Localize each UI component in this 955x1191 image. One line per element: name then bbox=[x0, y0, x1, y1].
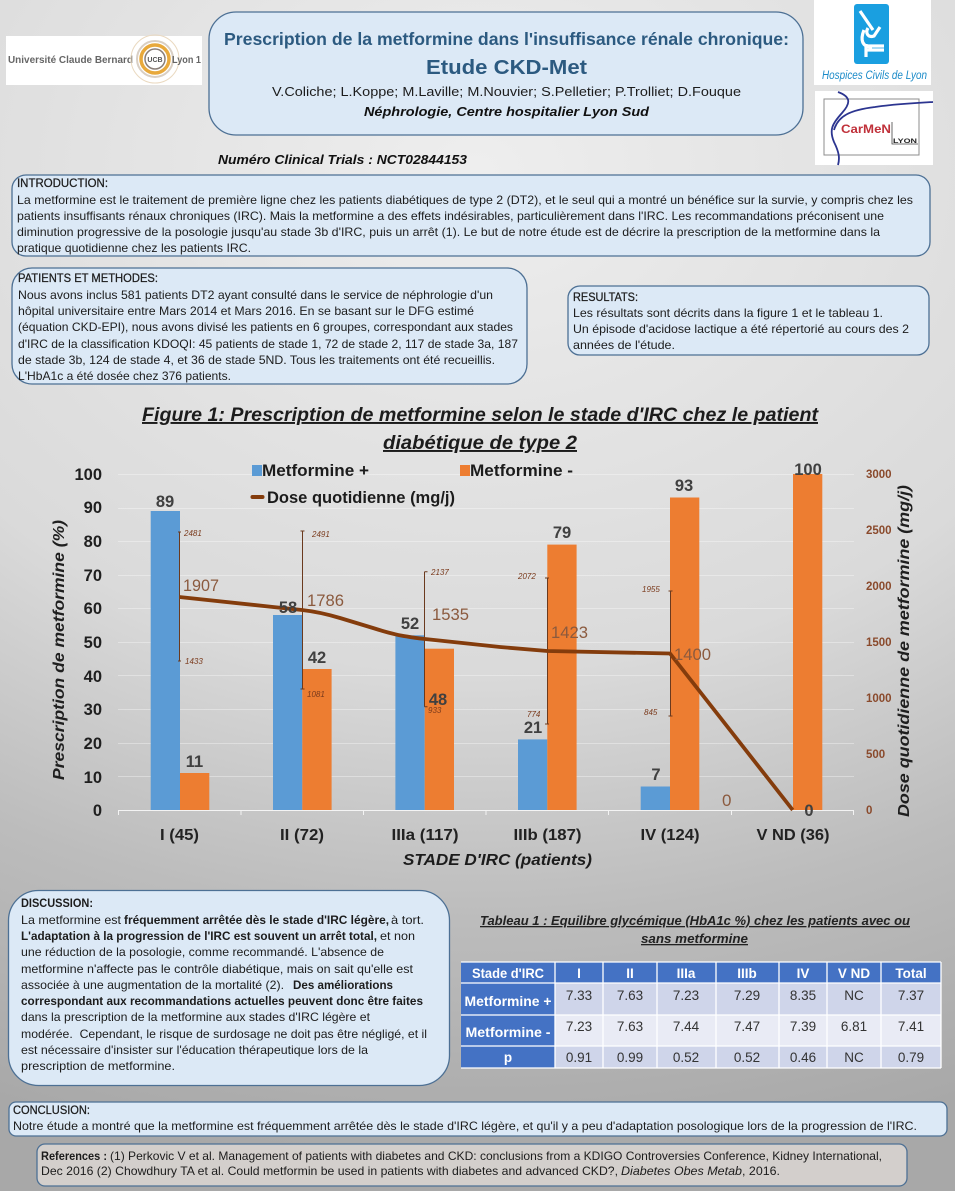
table row: p: 0.52 bbox=[734, 1050, 760, 1065]
right axis values bbox=[866, 469, 892, 817]
table row: p: 0.79 bbox=[898, 1050, 924, 1065]
error bar bounds: 774 bbox=[527, 710, 541, 719]
text: references bbox=[41, 1149, 882, 1178]
text: resultats: Un épisode d'acidose lactique a été répertorié au cours des 2 bbox=[573, 322, 909, 336]
logo: Hospices Civils de Lyon: Hospices Civils de Lyon bbox=[822, 70, 927, 82]
logo: Université Claude Bernard Lyon 1 bbox=[6, 35, 202, 85]
table header row: IIIb bbox=[737, 966, 757, 981]
right axis values: 3000 bbox=[866, 469, 892, 481]
table row: Metformine + bbox=[464, 988, 924, 1009]
left axis values: 100 bbox=[74, 466, 102, 484]
text: discussion: L'adaptation à la progression de l'IRC est souvent un arrêt total, bbox=[21, 929, 377, 943]
table row: Metformine -: 7.39 bbox=[790, 1019, 816, 1034]
text: discussion: est nécessaire d'insister sur l'éducation thérapeutique lors de la bbox=[21, 1043, 368, 1057]
text: patients et methodes: d'IRC de la classification KDOQI: 45 patients de stade 1, 72 de stade 2, 117 de stade 3a, 187 bbox=[18, 337, 518, 351]
right axis values: 2500 bbox=[866, 525, 892, 537]
panel: introduction bbox=[12, 175, 930, 256]
left axis values: 50 bbox=[84, 634, 102, 652]
text: discussion: Des améliorations bbox=[293, 978, 393, 992]
heading: resultats: RESULTATS: bbox=[573, 290, 638, 304]
text: discussion bbox=[21, 913, 427, 1073]
left axis values: 60 bbox=[84, 600, 102, 618]
table title: Tableau 1 : Equilibre glycémique (HbA1c %) chez les patients avec ou bbox=[480, 913, 910, 928]
figure title bbox=[142, 404, 820, 454]
left axis values: 10 bbox=[84, 769, 102, 787]
error bar bounds: 845 bbox=[644, 708, 658, 717]
error bar bounds: 2481 bbox=[183, 529, 202, 538]
main title: Prescription de la metformine dans l'insuffisance rénale chronique: bbox=[224, 29, 789, 49]
error bar bounds: 933 bbox=[428, 706, 442, 715]
text: resultats: années de l'étude. bbox=[573, 338, 675, 352]
table row: Metformine -: 7.23 bbox=[566, 1019, 592, 1034]
legend: Metformine - bbox=[470, 462, 573, 480]
text: patients et methodes bbox=[18, 288, 518, 383]
table row: Metformine +: 7.37 bbox=[898, 988, 924, 1003]
text: patients et methodes: (équation CKD-EPI), nous avons divisé les patients en 6 groupes, correspondant aux stades bbox=[18, 320, 513, 334]
logo: Hospices Civils de Lyon bbox=[814, 0, 931, 85]
heading: discussion: DISCUSSION: bbox=[21, 896, 93, 910]
left axis values: 30 bbox=[84, 701, 102, 719]
heading: patients et methodes: PATIENTS ET METHODES: bbox=[18, 271, 158, 285]
table title: sans metformine bbox=[641, 931, 748, 946]
x axis title: STADE D'IRC (patients) bbox=[403, 852, 592, 869]
legend: Metformine + bbox=[262, 462, 369, 480]
bar value labels: 58 bbox=[279, 599, 297, 617]
left axis values: 0 bbox=[93, 802, 102, 820]
right axis title: Dose quotidienne de metformine (mg/j) bbox=[896, 485, 913, 817]
error bar bounds: 1955 bbox=[642, 585, 660, 594]
bar value labels: 21 bbox=[524, 719, 542, 737]
gridlines and x axis bbox=[118, 474, 854, 815]
table row: Metformine +: 7.33 bbox=[566, 988, 592, 1003]
right axis values: 0 bbox=[866, 805, 872, 817]
chart: prescription de metformine bbox=[51, 461, 913, 869]
panel: references bbox=[37, 1144, 907, 1186]
category labels: I (45) bbox=[160, 827, 199, 844]
text: discussion: metformine n'affecte pas le contrôle diabétique, mais on sait qu'elle est bbox=[21, 962, 414, 976]
table title bbox=[480, 913, 910, 946]
table row: Metformine +: Metformine + bbox=[464, 994, 552, 1009]
table row: Metformine -: 7.63 bbox=[617, 1019, 643, 1034]
table row: Metformine - bbox=[466, 1019, 924, 1040]
bar value labels: 93 bbox=[675, 477, 693, 495]
bar value labels: 79 bbox=[553, 524, 571, 542]
text: introduction: La metformine est le traitement de première ligne chez les patients diabétiques de type 2 (DT2), et le seul qui a montré un bénéfice sur la survie, y compris chez les bbox=[17, 193, 913, 207]
legend: Dose quotidienne (mg/j) bbox=[267, 489, 455, 507]
logo: Université Claude Bernard Lyon 1: Université Claude Bernard bbox=[8, 55, 133, 66]
table row: Metformine +: 7.63 bbox=[617, 988, 643, 1003]
bar value labels: 52 bbox=[401, 615, 419, 633]
left axis values: 90 bbox=[84, 499, 102, 517]
text: conclusion: Notre étude a montré que la metformine est fréquemment arrêtée dès le stade d'IRC légère, et qu'il y a peu d'adaptation posologique lors de la progression de l'IRC. bbox=[13, 1119, 917, 1133]
text: discussion: modérée. Cependant, le risque de surdosage ne doit pas être négligé, et il bbox=[21, 1027, 427, 1041]
category labels: II (72) bbox=[280, 827, 324, 844]
heading: conclusion: CONCLUSION: bbox=[13, 1103, 90, 1117]
bar value labels bbox=[156, 461, 822, 820]
text: discussion: correspondant aux recommandations actuelles peuvent donc être faites bbox=[21, 994, 423, 1008]
error bar bounds: 2137 bbox=[430, 568, 449, 577]
dose value labels: 1423 bbox=[551, 623, 588, 642]
panel: discussion bbox=[8, 890, 450, 1086]
text: introduction: patients insuffisants rénaux chroniques (IRC). Mais la metformine a des effets indésirables, particulièrement dans l'IRC. Les recommandations préconisent une bbox=[17, 209, 884, 223]
figure title: diabétique de type 2 bbox=[383, 432, 577, 454]
category labels: IIIa (117) bbox=[392, 827, 458, 844]
text: patients et methodes: de stade 3b, 124 de stade 4, et 36 de stade 5ND. Tous les traitements ont été recueillis. bbox=[18, 353, 495, 367]
authors: V.Coliche; L.Koppe; M.Laville; M.Nouvier; S.Pelletier; P.Trolliet; D.Fouque bbox=[272, 84, 741, 99]
table row: p: 0.46 bbox=[790, 1050, 816, 1065]
left axis values bbox=[74, 466, 102, 820]
table: HbA1c bbox=[461, 962, 941, 1068]
table header row: II bbox=[626, 966, 634, 981]
table header row: Total bbox=[895, 966, 927, 981]
category labels bbox=[160, 827, 830, 844]
bar value labels: 89 bbox=[156, 493, 174, 511]
text: introduction: pratique quotidienne chez les patients IRC. bbox=[17, 241, 251, 255]
logo: CarMeN Lyon: LYON bbox=[893, 139, 917, 145]
bars: Metformine - bbox=[180, 474, 822, 810]
table row: p: 0.52 bbox=[673, 1050, 699, 1065]
error bar bounds: 2491 bbox=[311, 530, 330, 539]
bars: Metformine + bbox=[151, 511, 670, 810]
right axis values: 1500 bbox=[866, 637, 892, 649]
title panel bbox=[209, 12, 803, 135]
panel: resultats bbox=[568, 286, 929, 355]
dose value labels: 0 bbox=[722, 791, 731, 810]
error bar bounds: 1081 bbox=[307, 690, 325, 699]
error bar bounds: 2072 bbox=[517, 572, 536, 581]
table header row: I bbox=[577, 966, 581, 981]
left axis title: Prescription de metformine (%) bbox=[51, 520, 68, 780]
category labels: IIIb (187) bbox=[514, 827, 582, 844]
error bars bbox=[178, 531, 672, 724]
category labels: IV (124) bbox=[640, 827, 700, 844]
table row: Metformine +: 7.29 bbox=[734, 988, 760, 1003]
bar value labels: 42 bbox=[308, 649, 326, 667]
table row: p: 0.99 bbox=[617, 1050, 643, 1065]
right axis values: 500 bbox=[866, 749, 885, 761]
error bar bounds bbox=[183, 529, 660, 719]
text: discussion: prescription de metformine. bbox=[21, 1059, 175, 1073]
text: discussion: fréquemment arrêtée dès le stade d'IRC légère, bbox=[124, 913, 389, 927]
text: patients et methodes: L'HbA1c a été dosée chez 376 patients. bbox=[18, 369, 231, 383]
text: patients et methodes: hôpital universitaire entre Mars 2014 et Mars 2016. En se basant sur le DFG estimé bbox=[18, 304, 474, 318]
line: dose quotidienne bbox=[179, 597, 793, 810]
text: discussion: à tort. bbox=[391, 913, 424, 927]
text: discussion: dans la prescription de la metformine aux stades d'IRC légère et bbox=[21, 1010, 371, 1024]
dose value labels bbox=[183, 576, 731, 810]
table row: Metformine +: NC bbox=[844, 988, 864, 1003]
logo: CarMeN Lyon bbox=[815, 91, 933, 165]
text: discussion: La metformine est bbox=[21, 913, 122, 927]
error bar bounds: 1433 bbox=[185, 657, 203, 666]
table row: Metformine -: 7.44 bbox=[673, 1019, 700, 1034]
text: references: (1) Perkovic V et al. Management of patients with diabetes and CKD: conclusions from a KDIGO Controversies Conference, Kidney International, bbox=[110, 1149, 882, 1163]
table row: Metformine -: 6.81 bbox=[841, 1019, 867, 1034]
left axis values: 70 bbox=[84, 567, 102, 585]
text: resultats bbox=[573, 306, 909, 352]
text: introduction: diminution progressive de la posologie jusqu'au stade 3b d'IRC, puis un arrêt (1). Le but de notre étude est de décrire la prescription de la metformine dans la bbox=[17, 225, 880, 239]
table row: p bbox=[504, 1050, 924, 1065]
table header row bbox=[472, 966, 927, 981]
text: references: Dec 2016 (2) Chowdhury TA et al. Could metformin be used in patients with diabetes and advanced CKD?, bbox=[41, 1164, 618, 1178]
text: resultats: Les résultats sont décrits dans la figure 1 et le tableau 1. bbox=[573, 306, 883, 320]
left axis values: 40 bbox=[84, 668, 102, 686]
table row: Metformine -: 7.47 bbox=[734, 1019, 760, 1034]
table header row: V ND bbox=[838, 966, 870, 981]
table row: p: p bbox=[504, 1050, 512, 1065]
heading: introduction: INTRODUCTION: bbox=[17, 176, 108, 190]
bar value labels: 48 bbox=[429, 691, 447, 709]
left axis values: 20 bbox=[84, 735, 102, 753]
bar value labels: 11 bbox=[186, 753, 203, 771]
table row: Metformine -: 7.41 bbox=[898, 1019, 924, 1034]
legend bbox=[252, 462, 573, 507]
text: discussion: et non bbox=[380, 929, 415, 943]
logo: Université Claude Bernard Lyon 1: UCB bbox=[147, 57, 163, 64]
table row: p: NC bbox=[844, 1050, 864, 1065]
table header row: Stade d'IRC bbox=[472, 966, 544, 981]
panel: patients et methodes bbox=[12, 268, 527, 384]
affiliation: Néphrologie, Centre hospitalier Lyon Sud bbox=[364, 104, 650, 119]
text: references: Diabetes Obes Metab bbox=[621, 1164, 742, 1178]
text: references: , 2016. bbox=[742, 1164, 780, 1178]
figure title: Figure 1: Prescription de metformine selon le stade d'IRC chez le patient bbox=[142, 404, 820, 426]
table row: Metformine -: Metformine - bbox=[466, 1025, 550, 1040]
left axis values: 80 bbox=[84, 533, 102, 551]
dose value labels: 1535 bbox=[432, 605, 469, 624]
text: discussion: une réduction de la posologie, comme recommandé. L'absence de bbox=[21, 945, 384, 959]
panel: conclusion bbox=[9, 1102, 947, 1136]
dose value labels: 1400 bbox=[674, 645, 711, 664]
table row: Metformine +: 7.23 bbox=[673, 988, 699, 1003]
right axis values: 1000 bbox=[866, 693, 892, 705]
logo: CarMeN Lyon: CarMeN bbox=[841, 122, 891, 136]
text: patients et methodes: Nous avons inclus 581 patients DT2 ayant consulté dans le service de néphrologie d'un bbox=[18, 288, 493, 302]
table row: Metformine +: 8.35 bbox=[790, 988, 816, 1003]
right axis values: 2000 bbox=[866, 581, 892, 593]
subtitle: Etude CKD-Met bbox=[426, 56, 587, 79]
bar value labels: 100 bbox=[794, 461, 822, 479]
bar value labels: 0 bbox=[804, 802, 814, 820]
bar value labels: 7 bbox=[651, 766, 661, 784]
dose value labels: 1907 bbox=[183, 576, 219, 595]
table header row: IV bbox=[797, 966, 809, 981]
category labels: V ND (36) bbox=[756, 827, 830, 844]
clinical trial number: Numéro Clinical Trials : NCT02844153 bbox=[218, 153, 467, 167]
text: discussion: associée à une augmentation de la mortalité (2). bbox=[21, 978, 284, 992]
text: references: References : bbox=[41, 1149, 107, 1163]
table header row: IIIa bbox=[677, 966, 696, 981]
dose value labels: 1786 bbox=[307, 591, 344, 610]
text: introduction bbox=[17, 193, 913, 255]
logo: Université Claude Bernard Lyon 1: Lyon 1 bbox=[172, 55, 201, 66]
table row: p: 0.91 bbox=[566, 1050, 592, 1065]
